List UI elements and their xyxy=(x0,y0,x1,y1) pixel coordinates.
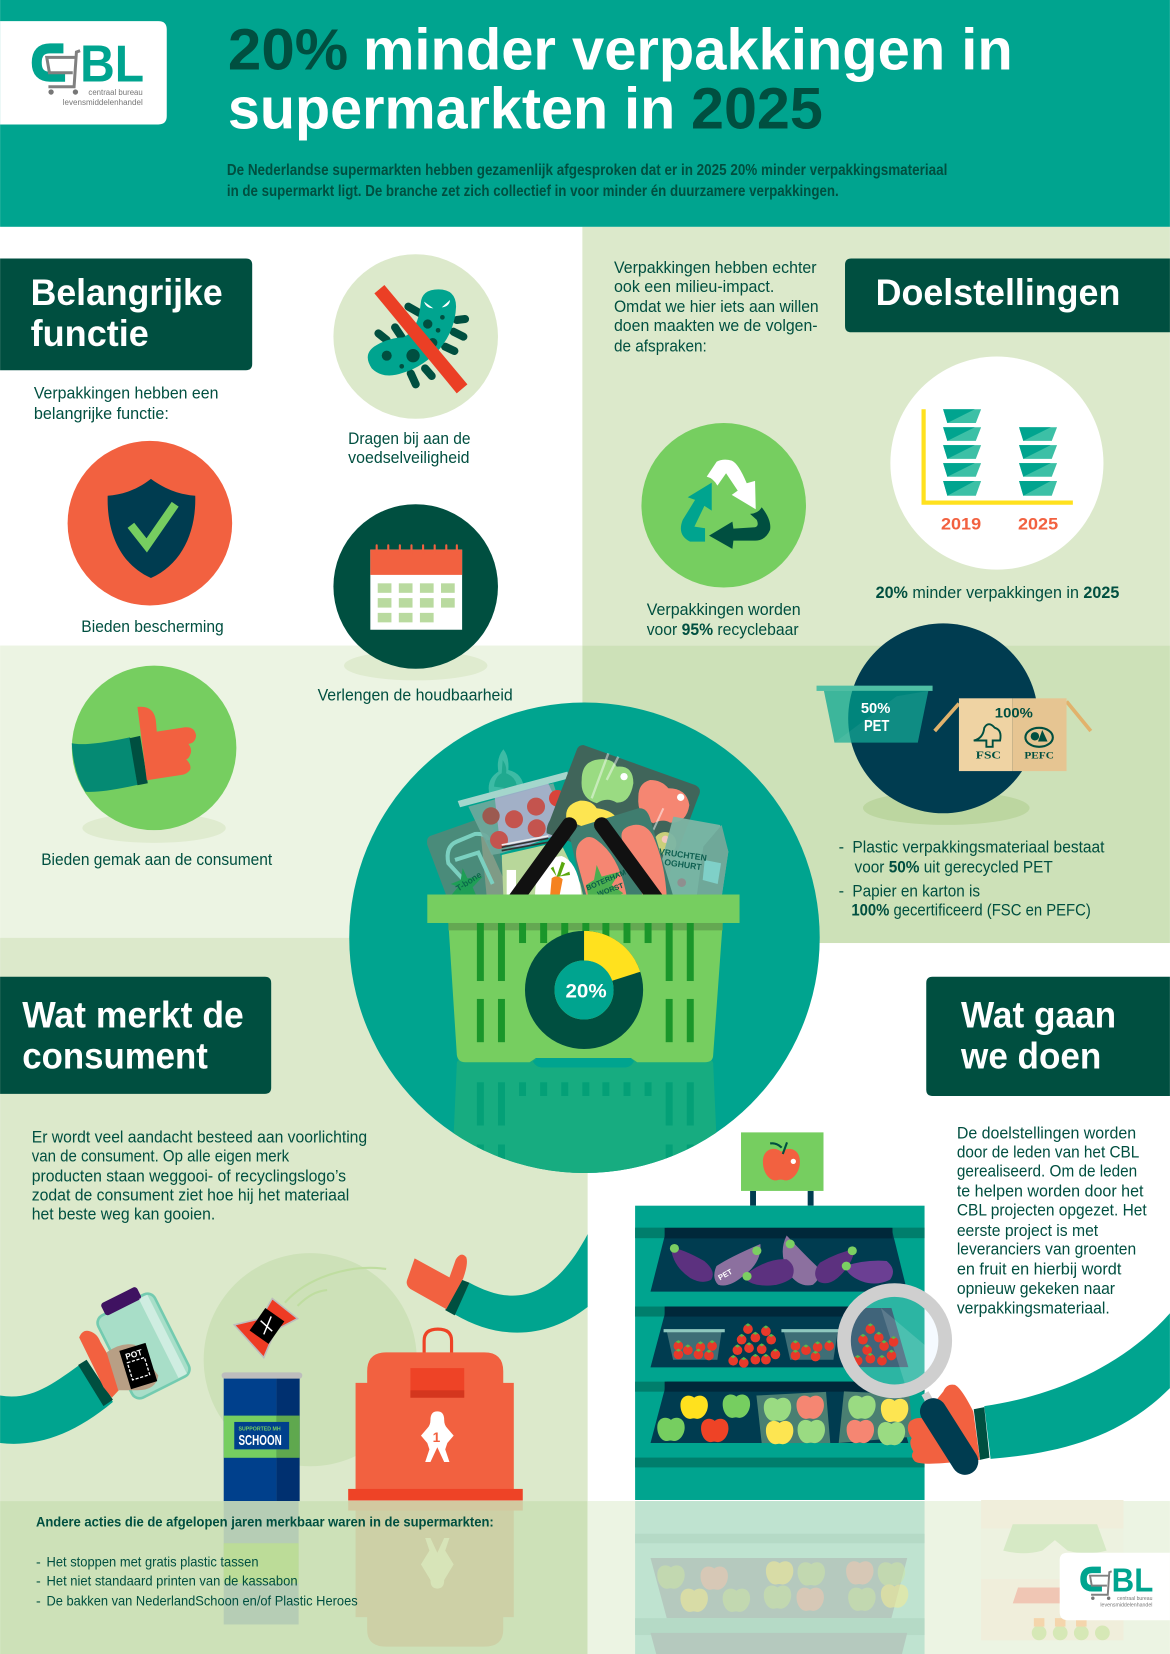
basket body xyxy=(427,895,740,1068)
label: recyclebaar xyxy=(647,601,801,639)
eggplant behind tray xyxy=(488,749,523,792)
text: doelstellingen leden: eerste project is met xyxy=(957,1222,1099,1240)
text: doelstellingen leden: te helpen worden door het xyxy=(957,1183,1144,1201)
eggplants xyxy=(670,1235,893,1286)
title: supermarkten in xyxy=(228,77,675,142)
icon: bacteria xyxy=(333,254,498,419)
reflection: market stall xyxy=(981,1500,1123,1640)
reflection: shelf xyxy=(635,1501,925,1654)
heading: Wat gaan we doen xyxy=(926,977,1170,1096)
sandwich meat pack: BOTERHAM xyxy=(585,868,627,892)
icon: PET tub and certified box xyxy=(817,623,1091,825)
carrot pack xyxy=(502,845,583,894)
text: voorlichting consument xyxy=(32,1128,367,1223)
intro text: De Nederlandse supermarkten hebben gezamenlijk afgesproken dat er in 2025 20% minder verpakkingsmateriaal xyxy=(227,162,947,179)
cardboard box xyxy=(935,698,1091,771)
small apple behind carton xyxy=(656,832,670,854)
heading: Wat gaan we doen: we doen xyxy=(960,1036,1101,1077)
intro text: in de supermarkt ligt. De branche zet zich collectief in voor minder én duurzamere verpakkingen. xyxy=(227,183,839,200)
text: belangrijke functie intro: belangrijke functie: xyxy=(34,405,169,423)
heading: Doelstellingen xyxy=(845,258,1170,332)
packaging in basket xyxy=(427,745,728,900)
label: voedselveiligheid: Dragen bij aan de xyxy=(348,430,471,448)
header band xyxy=(0,0,1170,227)
text: voorlichting consument: Er wordt veel aandacht besteed aan voorlichting xyxy=(32,1128,367,1146)
text: milieu-impact xyxy=(614,259,819,355)
text: andere acties: - xyxy=(36,1554,41,1570)
text: milieu-impact: Verpakkingen hebben echter xyxy=(614,259,817,277)
text: doelstellingen leden: De doelstellingen worden xyxy=(957,1125,1136,1143)
label: recyclebaar: voor 95% recyclebaar xyxy=(647,621,799,639)
chart: 2019 vs 2025 packaging stacks: 2019 xyxy=(941,515,981,534)
eggplants: PET xyxy=(716,1267,734,1282)
text: voorlichting consument: van de consument. Op alle eigen merk xyxy=(32,1147,290,1165)
heading: Wat gaan we doen: Wat gaan xyxy=(961,994,1116,1035)
sandwich meat pack: WORST xyxy=(596,881,625,898)
text: belangrijke functie intro: Verpakkingen hebben een xyxy=(34,385,218,403)
illustration: throwing bag into bin xyxy=(204,1253,523,1501)
text: milieu-impact: de afspraken: xyxy=(614,337,707,355)
logo: CBL: levensmiddelenhandel xyxy=(63,98,143,107)
label: bescherming: Bieden bescherming xyxy=(81,618,224,636)
text: milieu-impact: doen maakten we de volgen- xyxy=(614,317,818,335)
sandwich meat pack xyxy=(568,808,673,898)
text: doelstellingen leden: CBL projecten opgezet. Het xyxy=(957,1202,1147,1220)
intro text xyxy=(227,162,947,200)
text: doelstellingen leden: opnieuw gekeken naar xyxy=(957,1280,1116,1298)
text: PET and FSC bullets: - xyxy=(839,883,844,901)
apple tray xyxy=(546,745,700,859)
reflection: bins xyxy=(224,1501,523,1647)
central basket xyxy=(349,703,820,1181)
basket handles xyxy=(515,825,657,900)
donut chart: 20% xyxy=(540,931,640,1034)
shelf sign xyxy=(741,1132,824,1206)
text: milieu-impact: Omdat we hier iets aan willen xyxy=(614,298,819,316)
text: voorlichting consument: producten staan weggooi- of recyclingslogo’s xyxy=(32,1167,346,1185)
logo: CBL footer: BL xyxy=(1112,1562,1153,1599)
tomato tray xyxy=(458,772,570,855)
title: 2025 xyxy=(691,77,823,142)
text: andere acties: Het stoppen met gratis plastic tassen xyxy=(47,1554,259,1570)
yoghurt carton xyxy=(658,817,728,897)
chart: 2019 vs 2025 packaging stacks: 2025 xyxy=(1018,515,1058,534)
logo: CBL: BL xyxy=(80,35,144,93)
text: doelstellingen leden: en fruit en hierbij wordt xyxy=(957,1260,1122,1278)
yoghurt carton: OGHURT xyxy=(664,857,703,872)
illustration: jar in hand: POT xyxy=(124,1347,144,1362)
blue bin xyxy=(222,1372,302,1501)
text: PET and FSC bullets: voor 50% uit gerecycled PET xyxy=(855,858,1053,876)
yoghurt carton: VRUCHTEN xyxy=(658,846,707,863)
text: PET and FSC bullets: - xyxy=(839,838,844,856)
text: doelstellingen leden: leveranciers van groenten xyxy=(957,1241,1136,1259)
red bin xyxy=(348,1329,523,1501)
logo: CBL footer: levensmiddelenhandel xyxy=(1100,1603,1152,1609)
icon: thumb up xyxy=(72,666,236,843)
illustration: jar in hand xyxy=(0,1286,192,1444)
text: andere acties: Andere acties die de afgelopen jaren merkbaar waren in de supermarkten: xyxy=(36,1514,494,1530)
text: voorlichting consument: zodat de consument ziet hoe hij het materiaal xyxy=(32,1186,349,1204)
logo: CBL footer: centraal bureau xyxy=(1117,1596,1153,1602)
title xyxy=(228,18,1013,142)
text: PET and FSC bullets xyxy=(839,838,1105,920)
logo: CBL xyxy=(0,21,167,124)
icon: shield xyxy=(68,441,232,605)
red bin: 1 xyxy=(433,1430,441,1445)
blue bin: SUPPORTED MH xyxy=(238,1426,281,1432)
text: voorlichting consument: het beste weg kan gooien. xyxy=(32,1205,215,1223)
text: PET and FSC bullets: Plastic verpakkingsmateriaal bestaat xyxy=(852,838,1105,856)
icon: calendar xyxy=(333,504,498,680)
text: doelstellingen leden: door de leden van het CBL xyxy=(957,1144,1139,1162)
text: andere acties: De bakken van NederlandSchoon en/of Plastic Heroes xyxy=(47,1593,358,1609)
T-bone pack xyxy=(427,820,504,894)
heading: Wat merkt de consument xyxy=(0,977,271,1094)
heading: Belangrijke functie xyxy=(0,258,252,370)
heading: Doelstellingen: Doelstellingen xyxy=(876,272,1120,313)
title: 20% xyxy=(228,18,348,83)
heading: Wat merkt de consument: consument xyxy=(22,1036,208,1077)
donut chart: 20%: 20% xyxy=(565,981,607,1002)
blue bin: SCHOON xyxy=(238,1433,282,1449)
title: minder verpakkingen in xyxy=(363,18,1013,83)
heading: Belangrijke functie: functie xyxy=(31,313,149,354)
cardboard box: PEFC xyxy=(1024,751,1054,761)
PET tub: PET xyxy=(864,718,890,735)
text: andere acties xyxy=(36,1514,494,1609)
text: doelstellingen leden: verpakkingsmateriaal. xyxy=(957,1299,1110,1317)
logo: CBL: centraal bureau xyxy=(88,88,143,97)
label: voedselveiligheid xyxy=(348,430,471,467)
heading: Belangrijke functie: Belangrijke xyxy=(31,272,223,313)
text: doelstellingen leden xyxy=(957,1125,1147,1317)
label: 20% minder: 20% minder verpakkingen in 2025 xyxy=(876,584,1119,602)
illustration: thumbs-up arm xyxy=(407,1234,588,1333)
text: andere acties: - xyxy=(36,1593,41,1609)
icon: recycling xyxy=(641,423,806,588)
text: andere acties: - xyxy=(36,1573,41,1589)
chart: 2019 vs 2025 packaging stacks xyxy=(890,357,1103,570)
cardboard box: FSC xyxy=(976,750,1001,761)
illustration: produce shelf xyxy=(635,1132,1170,1500)
T-bone pack: T-bone xyxy=(454,869,483,893)
logo: CBL footer xyxy=(1060,1553,1170,1620)
apples xyxy=(657,1391,913,1445)
text: andere acties: Het niet standaard printen van de kassabon xyxy=(47,1573,298,1589)
tomatoes xyxy=(664,1323,838,1368)
red bag xyxy=(234,1299,298,1358)
label: houdbaarheid: Verlengen de houdbaarheid xyxy=(318,686,513,704)
label: voedselveiligheid: voedselveiligheid xyxy=(348,449,469,467)
label: gemak: Bieden gemak aan de consument xyxy=(41,851,273,869)
PET tub: 50% xyxy=(861,701,890,717)
text: milieu-impact: ook een milieu-impact. xyxy=(614,278,774,296)
PET tub xyxy=(817,686,933,743)
magnifier and arm xyxy=(844,1290,1170,1464)
text: belangrijke functie intro xyxy=(34,385,218,423)
text: doelstellingen leden: gerealiseerd. Om de leden xyxy=(957,1163,1137,1181)
heading: Wat merkt de consument: Wat merkt de xyxy=(22,994,244,1035)
cardboard box: 100% xyxy=(995,705,1033,721)
text: PET and FSC bullets: Papier en karton is xyxy=(852,883,980,901)
label: recyclebaar: Verpakkingen worden xyxy=(647,601,801,619)
basket reflection xyxy=(452,1059,718,1181)
text: PET and FSC bullets: 100% gecertificeerd (FSC en PEFC) xyxy=(851,902,1091,920)
